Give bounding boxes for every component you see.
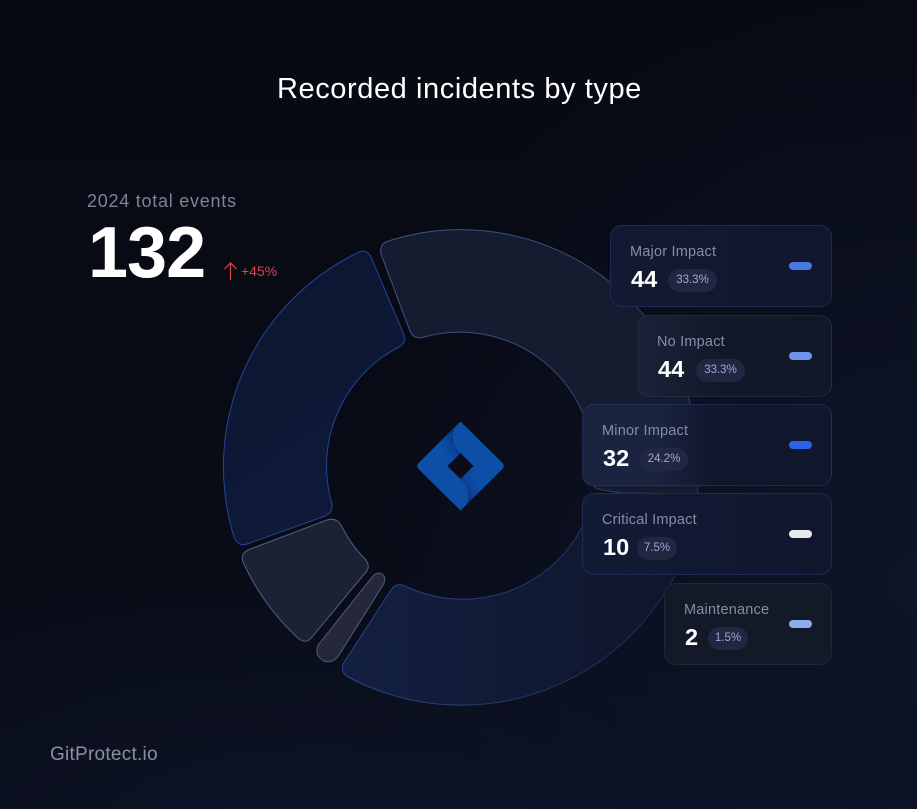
value: 44 bbox=[631, 266, 657, 292]
value: 44 bbox=[658, 356, 684, 382]
percentage pill: 1.5% bbox=[715, 632, 741, 644]
percentage pill bbox=[640, 448, 688, 471]
trend indicator: +45% bbox=[241, 263, 277, 279]
label: Minor Impact bbox=[602, 423, 688, 439]
legend swatch bbox=[789, 441, 812, 449]
value: 32 bbox=[603, 445, 629, 471]
segment: minor impact bbox=[342, 522, 695, 705]
legend swatch bbox=[789, 530, 812, 538]
legend swatch bbox=[789, 620, 812, 628]
value: 10 bbox=[603, 534, 629, 560]
percentage pill: 33.3% bbox=[704, 364, 737, 376]
legend swatch bbox=[789, 352, 812, 360]
total events label: 2024 total events bbox=[87, 191, 237, 211]
percentage pill: 24.2% bbox=[648, 453, 680, 465]
segment: critical impact bbox=[242, 519, 368, 641]
label: Critical Impact bbox=[602, 512, 697, 528]
total events number: 132 bbox=[88, 213, 205, 293]
percentage pill bbox=[637, 537, 677, 560]
label: Maintenance bbox=[684, 602, 769, 618]
segment: maintenance bbox=[317, 573, 385, 662]
percentage pill bbox=[696, 359, 745, 382]
title: Recorded incidents by type bbox=[277, 73, 642, 105]
card: critical impact bbox=[582, 493, 832, 575]
legend swatch bbox=[789, 262, 812, 270]
trend indicator bbox=[224, 262, 277, 280]
label: Major Impact bbox=[630, 244, 716, 260]
icon: jira logo bbox=[417, 422, 504, 510]
label: No Impact bbox=[657, 334, 725, 350]
segment: no impact bbox=[381, 230, 699, 494]
percentage pill: 7.5% bbox=[644, 542, 670, 554]
segment: major impact bbox=[223, 251, 405, 545]
percentage pill bbox=[708, 627, 748, 650]
card: no impact bbox=[637, 315, 832, 397]
brand: GitProtect.io bbox=[50, 744, 158, 765]
card: major impact bbox=[610, 225, 832, 307]
value: 2 bbox=[685, 624, 698, 650]
card: minor impact bbox=[582, 404, 832, 486]
percentage pill bbox=[668, 269, 717, 292]
card: maintenance bbox=[664, 583, 832, 665]
percentage pill: 33.3% bbox=[676, 274, 709, 286]
